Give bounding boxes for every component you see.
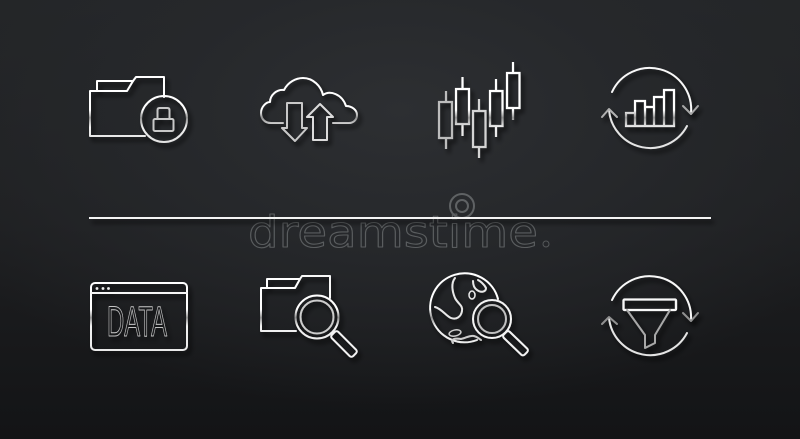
candle 1 bbox=[439, 91, 452, 149]
icon: cloud upload and download bbox=[261, 78, 357, 141]
watermark: dreamstime bbox=[248, 194, 549, 258]
icon: globe with magnifier bbox=[430, 273, 529, 356]
icon: candlestick chart bbox=[439, 62, 520, 158]
icon: refresh with funnel bbox=[602, 276, 698, 355]
icon: data browser window bbox=[91, 283, 187, 350]
divider line bbox=[89, 217, 711, 219]
candle 3 bbox=[473, 99, 486, 158]
watermark: dreamstime: dreamstime bbox=[248, 207, 538, 258]
icon: folder with lock bbox=[90, 77, 187, 142]
text: DATA: DATA bbox=[107, 298, 167, 346]
icon: refresh with bar chart bbox=[602, 68, 698, 148]
candle 5 bbox=[507, 62, 520, 120]
candle 4 bbox=[490, 79, 502, 137]
icon: folder with magnifier bbox=[261, 276, 358, 358]
candle 2 bbox=[456, 77, 469, 136]
